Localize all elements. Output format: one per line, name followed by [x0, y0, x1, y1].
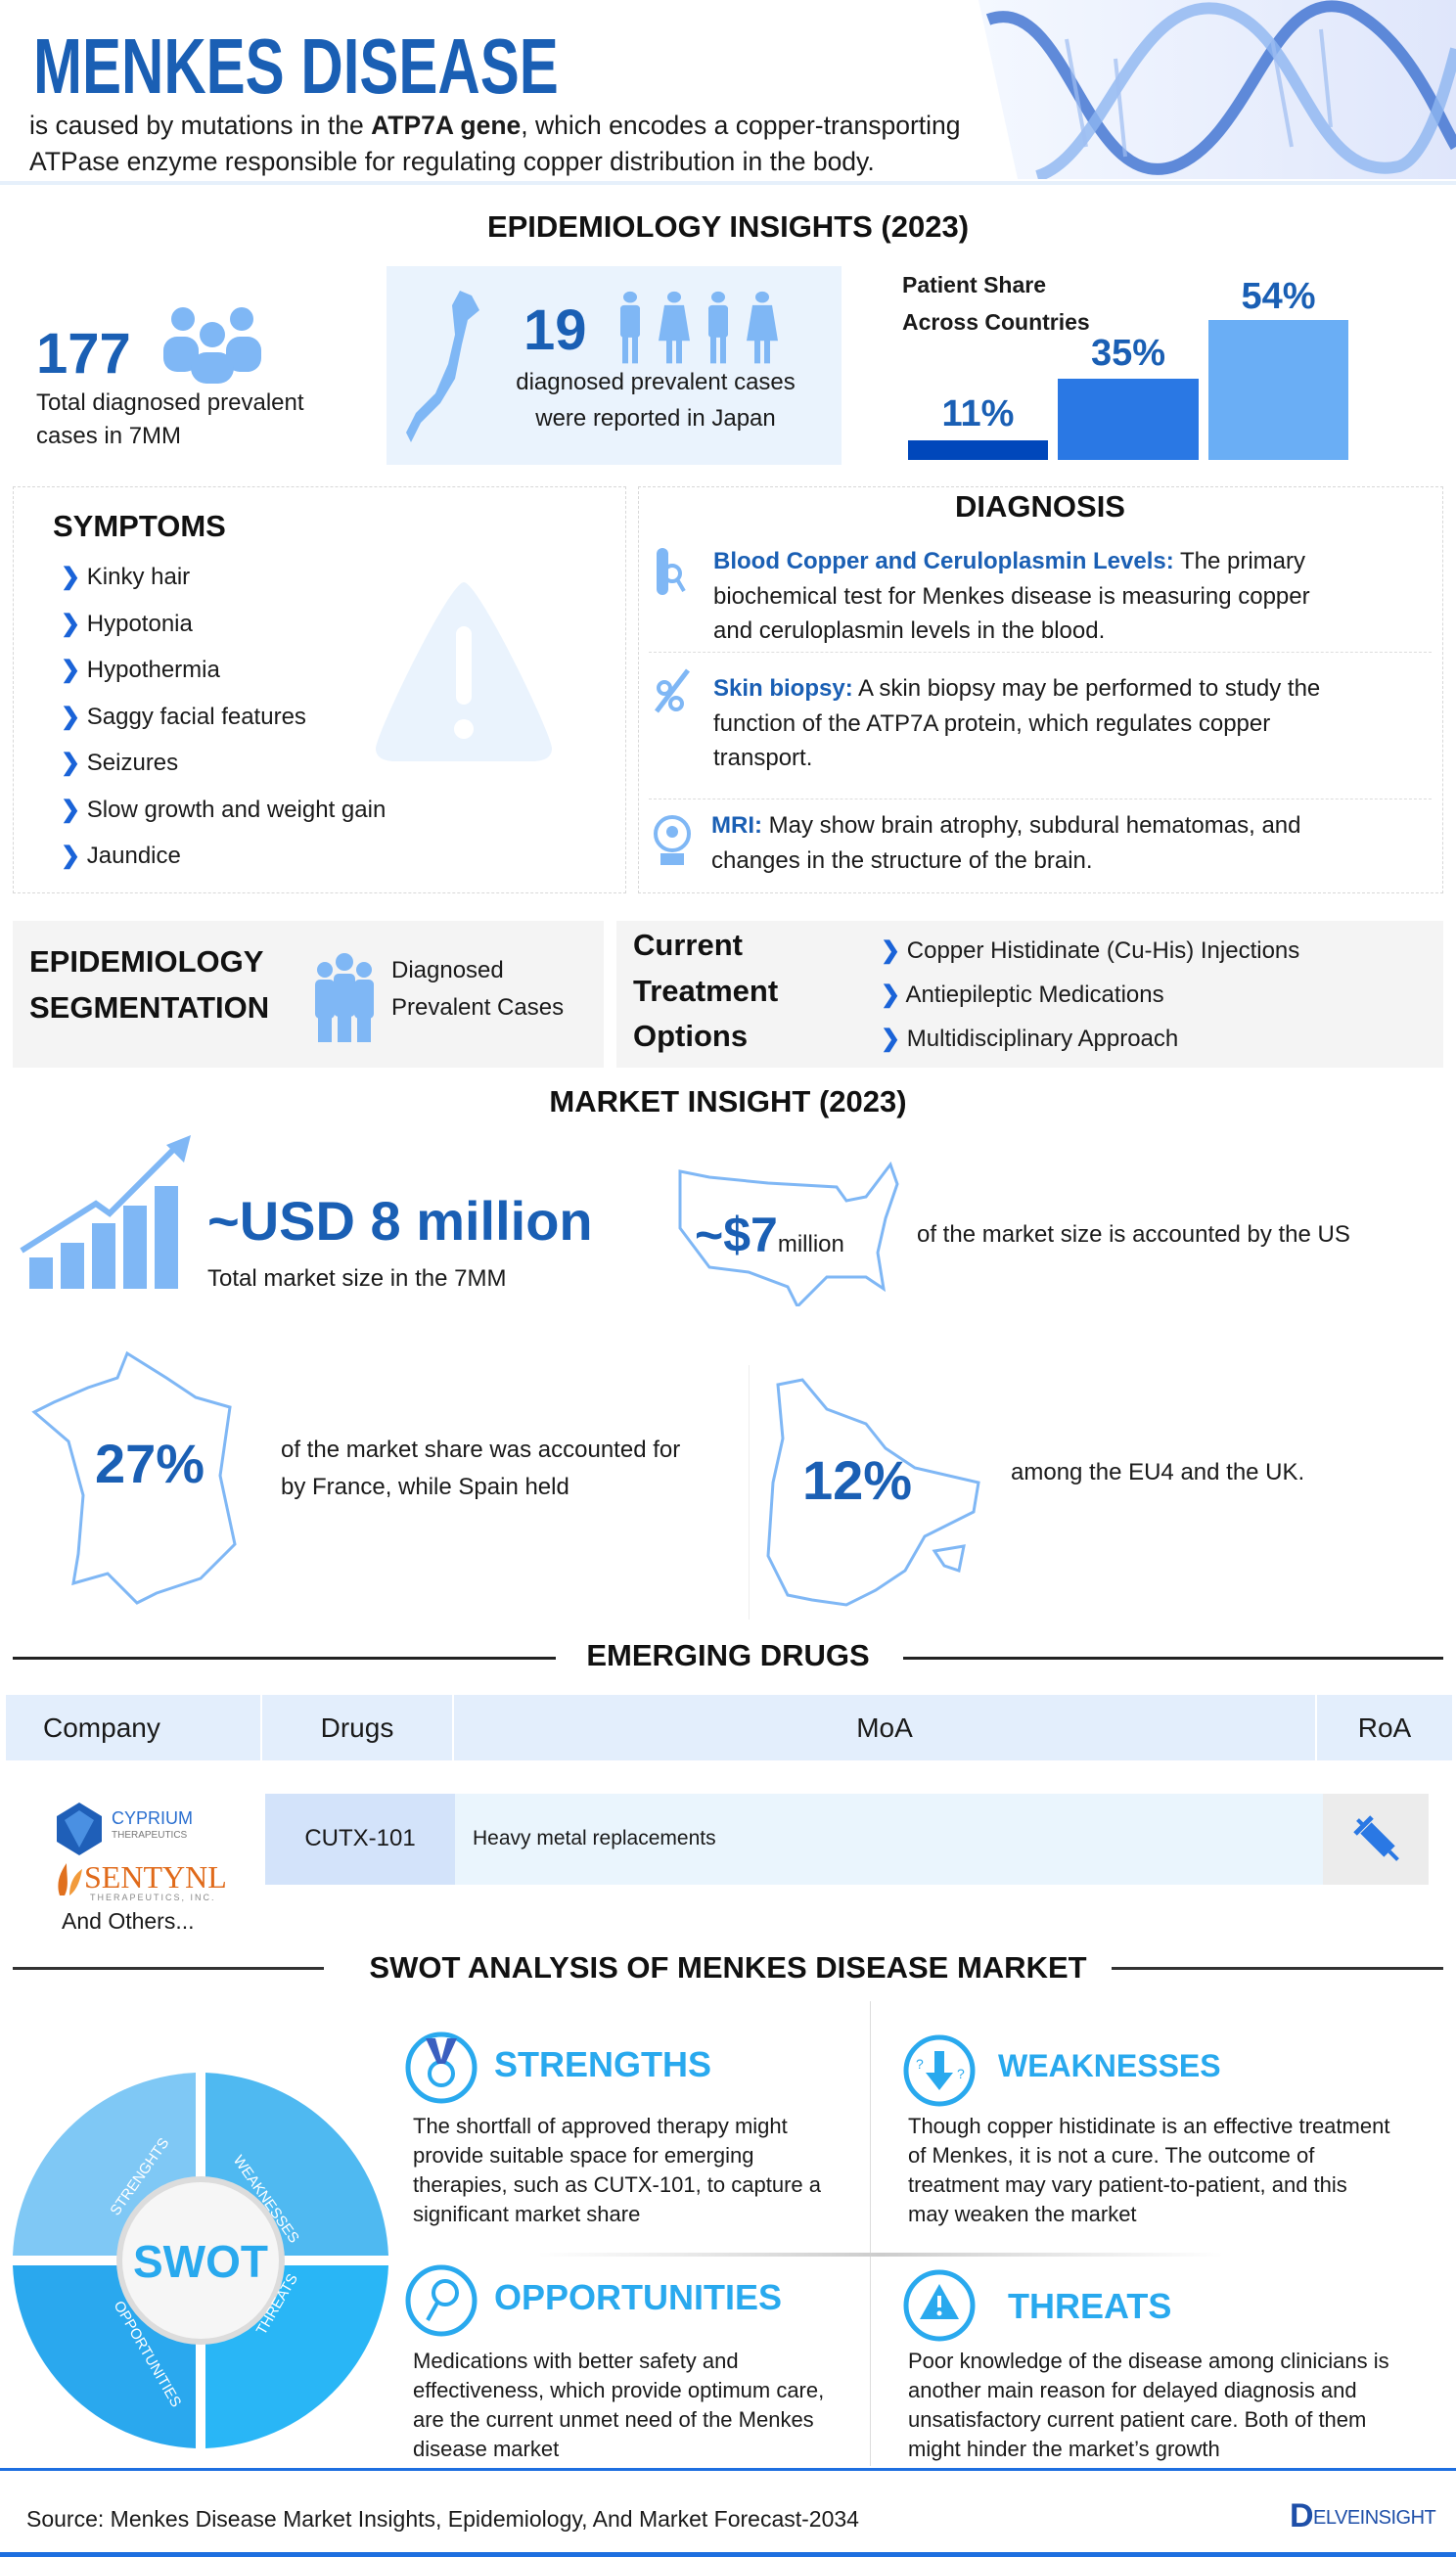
bar: 54% [1208, 320, 1348, 460]
panel: diagnosis: function of the ATP7A protein, which regulates copper [713, 710, 1270, 736]
heading: emerging drugs: EMERGING DRUGS [586, 1638, 870, 1672]
stat: France share: of the market share was accounted for [281, 1437, 680, 1463]
drug row [265, 1794, 455, 1885]
stat: 177 cases: Total diagnosed prevalent [36, 389, 304, 416]
stat: Spain share [749, 1365, 1304, 1620]
panel: symptoms: ❯ Hypotonia [61, 611, 193, 636]
logos: Cyprium and Sentynl: SENTYNL [84, 1859, 227, 1895]
intro text: is caused by mutations in the ATP7A gene, which encodes a copper-transporting [29, 111, 961, 140]
swot: threats: Poor knowledge of the disease among clinicians is [908, 2349, 1389, 2373]
swot: weaknesses: WEAKNESSES [998, 2048, 1221, 2083]
panel: current treatment options: ❯ Multidisciplinary Approach [881, 1026, 1178, 1052]
swot: opportunities: effectiveness, which provide optimum care, [413, 2378, 824, 2402]
chart: SWOT wheel: SWOT [133, 2236, 268, 2287]
icon: four people [620, 292, 778, 364]
panel: symptoms: ❯ Saggy facial features [61, 703, 306, 730]
icon: US map outline [679, 1162, 898, 1306]
chart: SWOT wheel [13, 2073, 388, 2448]
icon: warning [904, 2270, 975, 2341]
stat: Spain share: 12% [802, 1449, 912, 1511]
heading: epidemiology insights: EPIDEMIOLOGY INSIGHTS (2023) [487, 209, 969, 244]
intro text: ATPase enzyme responsible for regulating copper distribution in the body. [29, 147, 875, 176]
swot: weaknesses: treatment may vary patient-to-patient, and this [908, 2172, 1347, 2197]
table header: Drugs [321, 1712, 393, 1743]
panel: symptoms [13, 486, 626, 893]
icon: biopsy [655, 669, 690, 712]
table header: MoA [856, 1712, 913, 1743]
panel: current treatment options [616, 921, 1443, 1068]
swot: strengths: STRENGTHS [494, 2044, 711, 2084]
panel: current treatment options: ❯ Copper Histidinate (Cu-His) Injections [881, 937, 1299, 964]
icon: warning triangle watermark [376, 582, 552, 761]
stat: total market size [20, 1135, 593, 1292]
stat: 177 cases [36, 307, 304, 449]
icon: Japan map [406, 291, 479, 442]
panel: symptoms: ❯ Slow growth and weight gain [61, 797, 386, 822]
panel: Japan cases: were reported in Japan [535, 405, 776, 432]
logos: Cyprium and Sentynl: THERAPEUTICS [112, 1830, 187, 1841]
panel: Japan cases [387, 266, 842, 465]
swot: weaknesses: of Menkes, it is not a cure. The outcome of [908, 2143, 1314, 2168]
stat: 177 cases: cases in 7MM [36, 423, 181, 449]
swot: opportunities: disease market [413, 2437, 559, 2461]
stat: France share: 27% [95, 1433, 205, 1494]
heading: market insight: MARKET INSIGHT (2023) [549, 1084, 907, 1119]
icon: Spain map outline [767, 1378, 980, 1607]
heading: emerging drugs [13, 1638, 1443, 1672]
heading: swot analysis: SWOT ANALYSIS OF MENKES DISEASE MARKET [369, 1950, 1087, 1985]
panel: epidemiology segmentation: Diagnosed [391, 957, 504, 983]
icon: growth chart [20, 1135, 191, 1289]
icon: people group [163, 307, 261, 384]
swot: weaknesses [904, 2035, 1389, 2226]
icon: down arrow question: ? [957, 2066, 965, 2081]
chart: patient share across countries: 35% [1091, 333, 1165, 374]
panel: diagnosis: transport. [713, 745, 812, 771]
bar: 11% [908, 440, 1048, 460]
bar: 35% [1058, 379, 1199, 460]
stat: total market size: ~USD 8 million [207, 1190, 593, 1252]
icon: MRI scanner [654, 815, 691, 865]
logo: DelveInsight [1290, 2497, 1436, 2534]
chart: patient share across countries: 54% [1241, 276, 1316, 317]
swot: threats: might hinder the market’s growth [908, 2437, 1220, 2461]
icon: test tube [657, 548, 686, 595]
swot: strengths: significant market share [413, 2202, 640, 2226]
icon: down arrow question [904, 2035, 975, 2106]
logo: DelveInsight: D [1290, 2497, 1314, 2534]
swot: weaknesses: Though copper histidinate is an effective treatment [908, 2114, 1389, 2138]
chart: patient share across countries: Across Countries [902, 309, 1090, 335]
stat: Spain share: among the EU4 and the UK. [1011, 1459, 1304, 1485]
swot: threats: another main reason for delayed diagnosis and [908, 2378, 1357, 2402]
title: MENKES DISEASE [33, 23, 559, 110]
panel: diagnosis: Blood Copper and Ceruloplasmin Levels: The primary [713, 548, 1305, 574]
panel: diagnosis: Skin biopsy: A skin biopsy may be performed to study the [713, 675, 1320, 702]
swot: opportunities: are the current unmet need of the Menkes [413, 2407, 814, 2432]
table header: RoA [1358, 1712, 1411, 1743]
panel: diagnosis: DIAGNOSIS [955, 489, 1125, 524]
footer: source: Source: Menkes Disease Market Insights, Epidemiology, And Market Forecast-2034 [26, 2506, 859, 2532]
illustration: DNA helix [978, 0, 1456, 179]
icon: family [315, 953, 374, 1042]
chart: patient share across countries: 11% [942, 393, 1014, 434]
panel: epidemiology segmentation: EPIDEMIOLOGY [29, 944, 263, 979]
panel: symptoms: ❯ Jaundice [61, 843, 181, 869]
swot: opportunities: Medications with better safety and [413, 2349, 739, 2373]
panel: diagnosis [638, 486, 1443, 893]
stat: France share: by France, while Spain held [281, 1474, 569, 1500]
panel: current treatment options: Treatment [633, 973, 778, 1008]
stat: 177 cases: 177 [36, 322, 131, 386]
drug row: CUTX-101 [304, 1825, 416, 1851]
icon: medal [405, 2032, 478, 2104]
icon: magnifier [405, 2264, 478, 2337]
stat: France share [31, 1350, 680, 1605]
panel: symptoms: ❯ Seizures [61, 750, 178, 776]
panel: epidemiology segmentation [13, 921, 604, 1068]
chart: SWOT wheel: THREATS [253, 2271, 301, 2338]
panel: current treatment options: ❯ Antiepileptic Medications [881, 982, 1164, 1008]
chart: patient share across countries: Patient Share [902, 272, 1046, 297]
swot: strengths: therapies, such as CUTX-101, to capture a [413, 2172, 821, 2197]
icon: down arrow question: ? [916, 2056, 924, 2072]
swot: opportunities [405, 2264, 824, 2461]
stat: US market: of the market size is accounted by the US [917, 1221, 1350, 1248]
panel: symptoms: ❯ Hypothermia [61, 657, 220, 683]
panel: epidemiology segmentation: SEGMENTATION [29, 990, 269, 1025]
icon: France map outline [31, 1350, 237, 1605]
swot: strengths [405, 2032, 821, 2226]
logo: DelveInsight: ELVEINSIGHT [1313, 2507, 1435, 2529]
panel: diagnosis: MRI: May show brain atrophy, subdural hematomas, and [711, 812, 1301, 839]
table: emerging drugs: Heavy metal replacements [473, 1827, 716, 1849]
table: emerging drugs [6, 1695, 1452, 1934]
panel: epidemiology segmentation: Prevalent Cases [391, 994, 564, 1021]
chart: patient share across countries [902, 272, 1348, 460]
intro text [29, 111, 961, 176]
swot: threats: THREATS [1008, 2286, 1171, 2326]
stat: US market: ~$7million [695, 1208, 844, 1262]
panel: diagnosis: and ceruloplasmin levels in the blood. [713, 617, 1105, 644]
swot: strengths: The shortfall of approved therapy might [413, 2114, 788, 2138]
swot: strengths: provide suitable space for emerging [413, 2143, 754, 2168]
panel: symptoms: ❯ Kinky hair [61, 564, 190, 590]
panel: Japan cases: 19 [523, 298, 587, 362]
icon: syringe [1323, 1794, 1429, 1885]
swot: opportunities: OPPORTUNITIES [494, 2277, 782, 2317]
swot: threats: unsatisfactory current patient care. Both of them [908, 2407, 1366, 2432]
panel: diagnosis: biochemical test for Menkes disease is measuring copper [713, 583, 1310, 609]
panel: diagnosis: changes in the structure of the brain. [711, 847, 1093, 874]
stat: total market size: Total market size in the 7MM [207, 1265, 506, 1292]
swot: threats [904, 2270, 1389, 2461]
stat: US market [679, 1162, 1350, 1306]
panel: current treatment options: Options [633, 1019, 748, 1053]
chart: SWOT wheel: WEAKNESSES [230, 2153, 302, 2246]
table header [6, 1695, 1452, 1760]
logos: Cyprium and Sentynl: CYPRIUM [112, 1808, 193, 1828]
panel: current treatment options: Current [633, 928, 743, 962]
table header: Company [43, 1712, 160, 1743]
panel: Japan cases: diagnosed prevalent cases [516, 369, 796, 395]
chart: SWOT wheel: STRENGHTS [107, 2135, 172, 2218]
table: emerging drugs: And Others... [62, 1908, 195, 1934]
swot: weaknesses: may weaken the market [908, 2202, 1137, 2226]
logos: Cyprium and Sentynl [57, 1803, 227, 1902]
panel: symptoms: SYMPTOMS [53, 509, 226, 543]
logos: Cyprium and Sentynl: THERAPEUTICS, INC. [90, 1893, 216, 1902]
heading: swot analysis [13, 1950, 1443, 1985]
chart: SWOT wheel: OPPORTUNITIES [111, 2298, 184, 2410]
